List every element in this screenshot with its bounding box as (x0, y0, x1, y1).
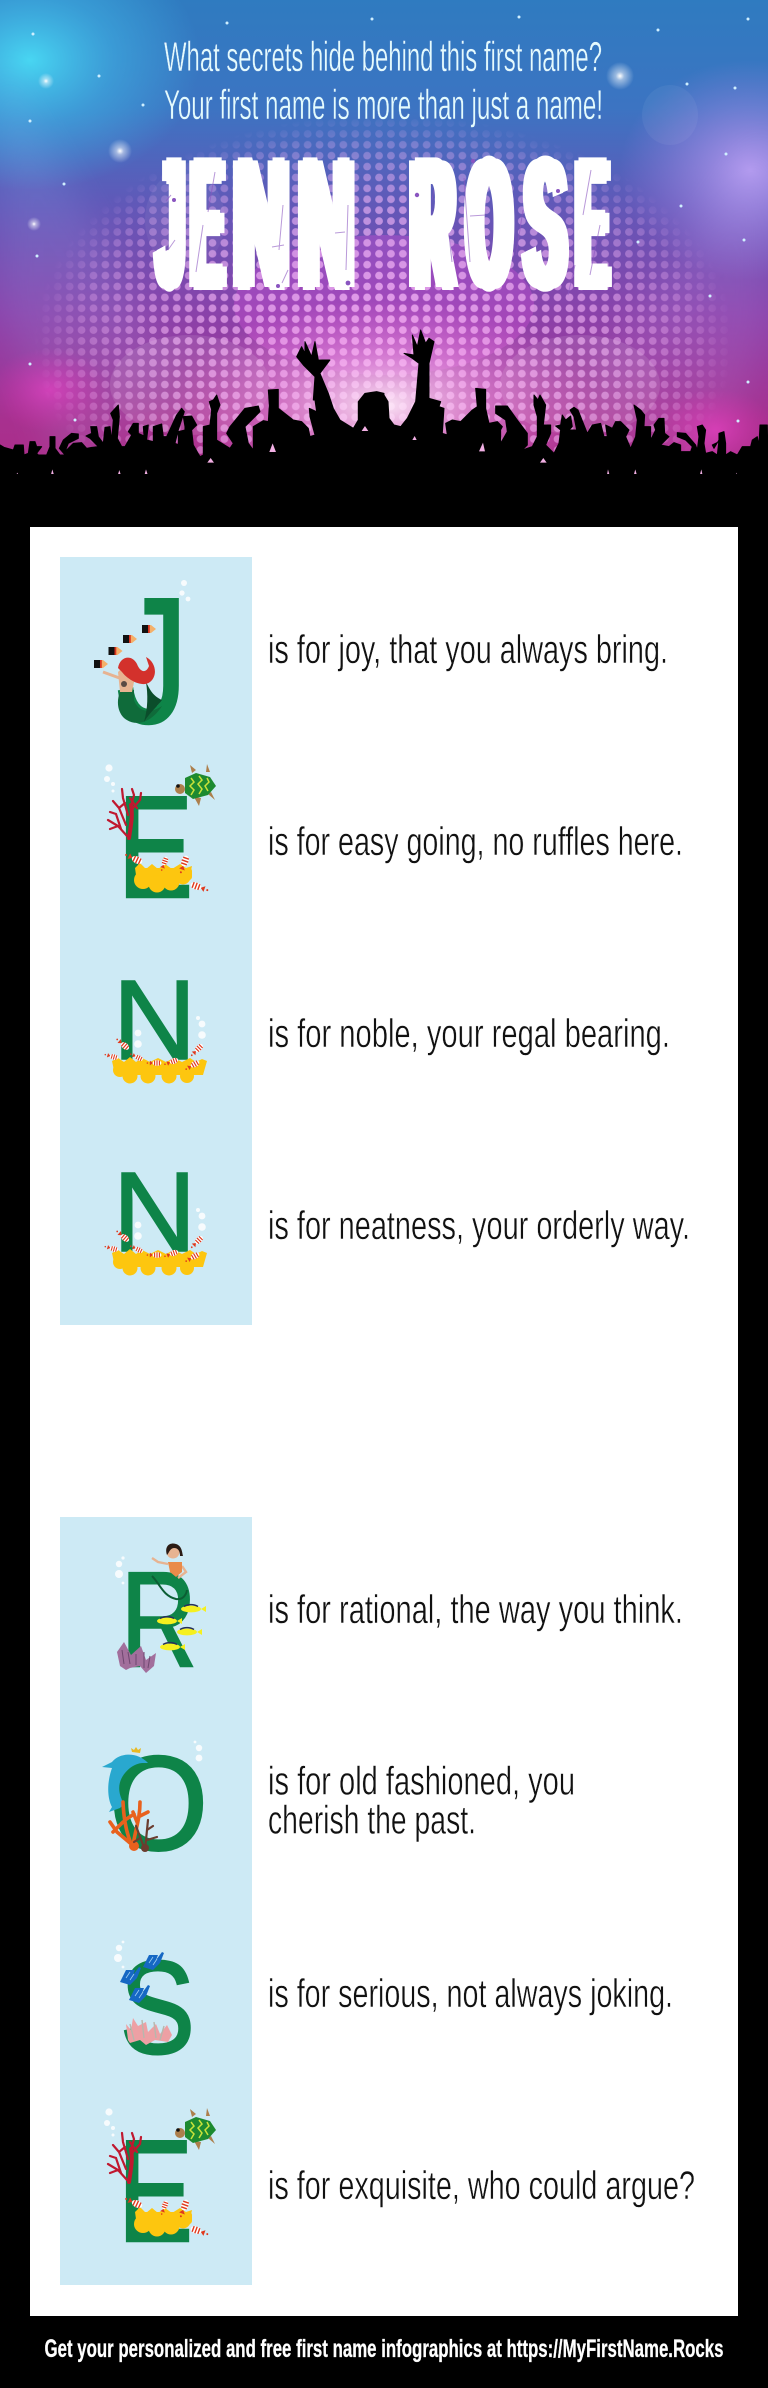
name title: S (525, 120, 565, 326)
heading (164, 33, 603, 128)
letter meanings: is for old fashioned, you (268, 1760, 575, 1804)
letter N with sponge, second: N (112, 1150, 197, 1276)
panel: letters column JENN (60, 557, 252, 1325)
letter E with coral and turtle, second (104, 2108, 216, 2272)
name title (152, 120, 612, 326)
panel: letters column ROSE (60, 1517, 252, 2285)
letter meanings (268, 628, 695, 2208)
name title: O (468, 120, 510, 326)
name title: E (576, 120, 608, 326)
title distress marks (166, 159, 600, 295)
letter R with mermaid and fish: R (121, 1543, 197, 1695)
letter E with coral and turtle, second: E (118, 2109, 193, 2272)
letter J with mermaid: J (117, 562, 188, 761)
crowd silhouette right (384, 330, 768, 490)
letter S with blue fish and pink coral: S (120, 1933, 195, 2081)
name title: N (234, 120, 288, 326)
letter E with coral and turtle: E (118, 765, 193, 928)
letter E with coral and turtle (104, 764, 216, 928)
name title: E (191, 120, 223, 326)
letter O with dolphin and coral: O (109, 1729, 208, 1878)
letter N with sponge: N (112, 958, 197, 1084)
name title: R (412, 120, 453, 326)
white panel (30, 527, 738, 2316)
hero background with crowd (0, 0, 768, 474)
sparkles (27, 16, 750, 422)
name title: J (156, 120, 184, 326)
name title: N (299, 120, 353, 326)
crowd silhouette left (0, 342, 384, 490)
letter meanings: cherish the past. (268, 1798, 476, 1842)
